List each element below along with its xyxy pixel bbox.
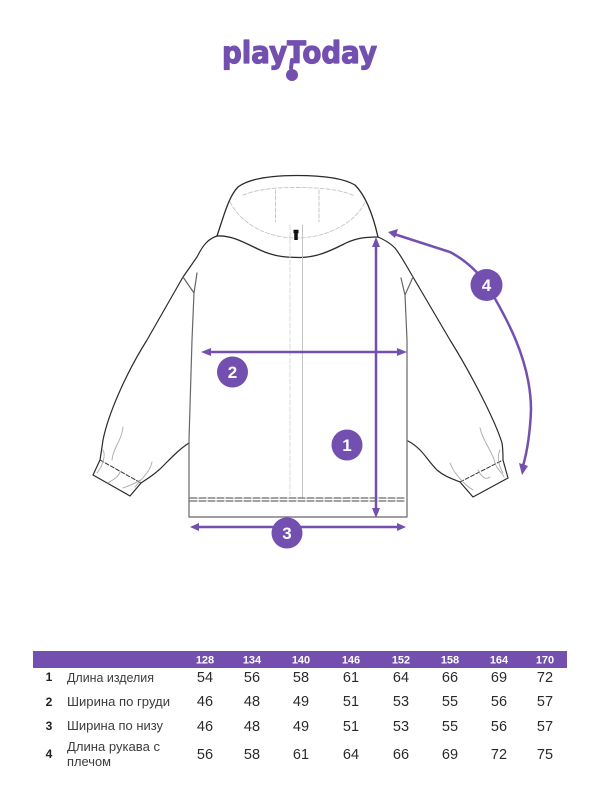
left sleeve — [93, 236, 217, 496]
row 3 — [46, 718, 553, 735]
table header: 158 — [441, 654, 459, 666]
measurement arrow 1: length — [372, 237, 380, 518]
row 1: Длина изделия — [67, 670, 154, 685]
table header: 170 — [536, 654, 554, 666]
row 1: 72 — [537, 670, 553, 686]
row 1: 66 — [442, 670, 458, 686]
table header — [33, 651, 567, 668]
body sides and hem — [183, 273, 413, 517]
table header: 134 — [243, 654, 262, 666]
row 1: 64 — [393, 670, 409, 686]
hem stitching — [190, 498, 405, 501]
row 3: 53 — [393, 719, 409, 735]
badge 1: 1 — [342, 436, 352, 455]
row 3: 46 — [197, 719, 213, 735]
row 4: 72 — [491, 747, 507, 763]
hood outline — [217, 176, 378, 237]
row 3: 56 — [491, 719, 507, 735]
row 3: 51 — [343, 719, 359, 735]
badge 2: 2 — [228, 363, 237, 382]
row 3: 57 — [537, 719, 553, 735]
row 3: 49 — [293, 719, 309, 735]
measurement arrow 3: hem — [190, 523, 406, 531]
row 4: 69 — [442, 747, 458, 763]
row 2: 56 — [491, 694, 507, 710]
badge 3 — [272, 518, 302, 548]
row 1: 1 — [46, 670, 53, 684]
row 4: 58 — [244, 747, 260, 763]
row 1: 56 — [244, 670, 260, 686]
row 1 — [46, 670, 553, 686]
badge 4: 4 — [482, 276, 492, 295]
row 3: 48 — [244, 719, 260, 735]
row 4: 61 — [293, 747, 309, 763]
table header: 146 — [342, 654, 360, 666]
table header: 164 — [490, 654, 509, 666]
row 2: 46 — [197, 694, 213, 710]
hood inner stitching — [230, 188, 365, 238]
jacket line drawing — [93, 176, 508, 517]
row 3: 3 — [46, 719, 53, 733]
table header: 152 — [392, 654, 410, 666]
row 4: 64 — [343, 747, 359, 763]
row 4: Длина рукава с — [67, 739, 161, 754]
row 2: 55 — [442, 694, 458, 710]
row 2: 57 — [537, 694, 553, 710]
badge 3: 3 — [282, 524, 292, 543]
row 3: Ширина по низу — [67, 718, 163, 733]
row 4: 4 — [46, 747, 53, 761]
cuff stitching — [100, 460, 503, 483]
table header: 140 — [292, 654, 310, 666]
badge 1 — [332, 430, 362, 460]
row 4: 66 — [393, 747, 409, 763]
row 2: 51 — [343, 694, 359, 710]
row 3: 55 — [442, 719, 458, 735]
row 2: 48 — [244, 694, 260, 710]
row 4: 56 — [197, 747, 213, 763]
row 2: 2 — [46, 695, 53, 709]
row 2: Ширина по груди — [67, 694, 170, 709]
logo: playToday: playToday — [222, 36, 377, 71]
row 2 — [46, 694, 553, 710]
zipper lines — [290, 225, 302, 497]
row 4: плечом — [67, 754, 111, 769]
row 2: 53 — [393, 694, 409, 710]
neckline wave — [217, 236, 378, 258]
row 1: 61 — [343, 670, 359, 686]
right sleeve — [378, 237, 508, 497]
row 1: 58 — [293, 670, 309, 686]
table header: 128 — [196, 654, 214, 666]
row 4: 75 — [537, 747, 553, 763]
row 1: 54 — [197, 670, 213, 686]
measurement arrow 2: chest — [201, 348, 407, 356]
size table — [33, 651, 567, 769]
icon: zipper pull — [294, 232, 298, 240]
row 2: 49 — [293, 694, 309, 710]
row 1: 69 — [491, 670, 507, 686]
row 4 — [46, 739, 553, 769]
measurement arrow 4: sleeve — [388, 229, 531, 475]
badge 4 — [470, 269, 502, 301]
badge 2 — [217, 356, 248, 388]
cuff gathers — [97, 427, 504, 490]
